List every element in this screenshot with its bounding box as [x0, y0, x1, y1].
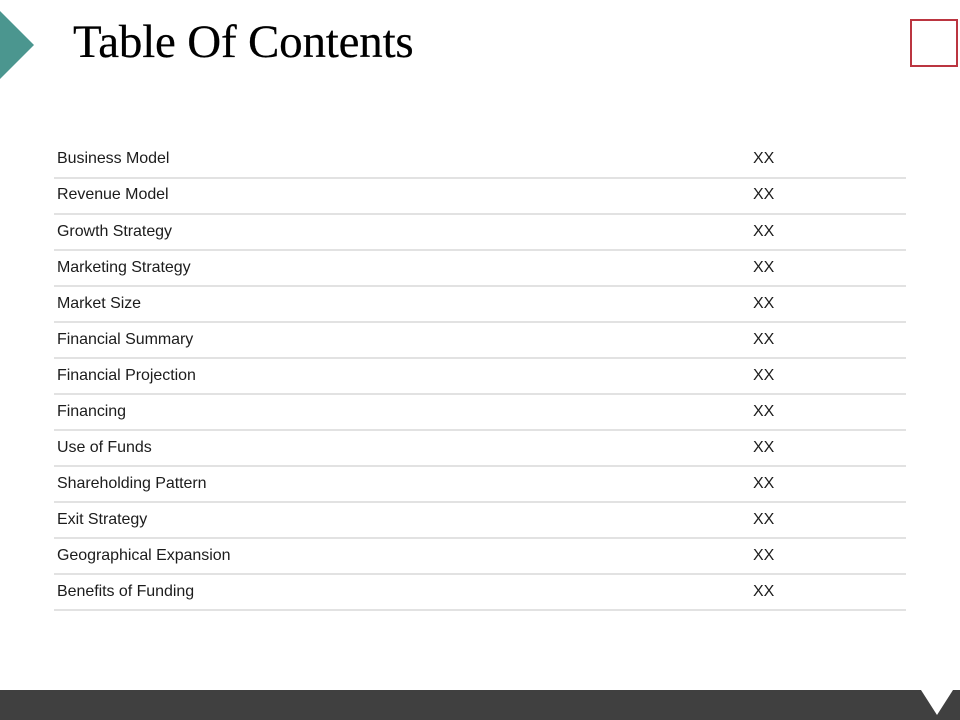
row: Geographical Expansion: XX	[753, 547, 774, 564]
row: Business Model: XX	[753, 150, 774, 167]
row: Exit Strategy	[57, 511, 774, 528]
row: Revenue Model: XX	[753, 186, 774, 203]
row: Revenue Model: Revenue Model	[57, 186, 169, 203]
row: Benefits of Funding: XX	[753, 583, 774, 600]
row: Financial Projection	[57, 367, 774, 384]
row: Shareholding Pattern	[57, 475, 774, 492]
row: Financial Projection: Financial Projection	[57, 367, 196, 384]
title: Table Of Contents	[73, 16, 414, 68]
row: Exit Strategy: Exit Strategy	[57, 511, 147, 528]
row: Revenue Model	[57, 186, 774, 203]
row: Use of Funds: Use of Funds	[57, 439, 152, 456]
icon: red outlined square	[910, 19, 958, 67]
row: Growth Strategy: XX	[753, 223, 774, 240]
row: Business Model	[57, 150, 774, 167]
row: Business Model: Business Model	[57, 150, 169, 167]
row: Shareholding Pattern: XX	[753, 475, 774, 492]
footer bar	[0, 690, 960, 720]
row: Marketing Strategy: XX	[753, 259, 774, 276]
row: Growth Strategy	[57, 223, 774, 240]
row: Financing: XX	[753, 403, 774, 420]
row: Market Size: Market Size	[57, 295, 141, 312]
row: Financial Projection: XX	[753, 367, 774, 384]
row: Growth Strategy: Growth Strategy	[57, 223, 172, 240]
row: Financing	[57, 403, 774, 420]
row: Financial Summary	[57, 331, 774, 348]
row: Use of Funds: XX	[753, 439, 774, 456]
row: Use of Funds	[57, 439, 774, 456]
row: Exit Strategy: XX	[753, 511, 774, 528]
row: Geographical Expansion	[57, 547, 774, 564]
row: Marketing Strategy: Marketing Strategy	[57, 259, 191, 276]
icon: white notch triangle	[921, 690, 953, 715]
row: Benefits of Funding: Benefits of Funding	[57, 583, 194, 600]
row: Financing: Financing	[57, 403, 126, 420]
row: Benefits of Funding	[57, 583, 774, 600]
row: Market Size	[57, 295, 774, 312]
row: Market Size: XX	[753, 295, 774, 312]
row: Marketing Strategy	[57, 259, 774, 276]
row: Financial Summary: Financial Summary	[57, 331, 193, 348]
icon: teal arrow marker	[0, 11, 34, 79]
row: Financial Summary: XX	[753, 331, 774, 348]
row: Shareholding Pattern: Shareholding Pattern	[57, 475, 207, 492]
row: Geographical Expansion: Geographical Expansion	[57, 547, 230, 564]
